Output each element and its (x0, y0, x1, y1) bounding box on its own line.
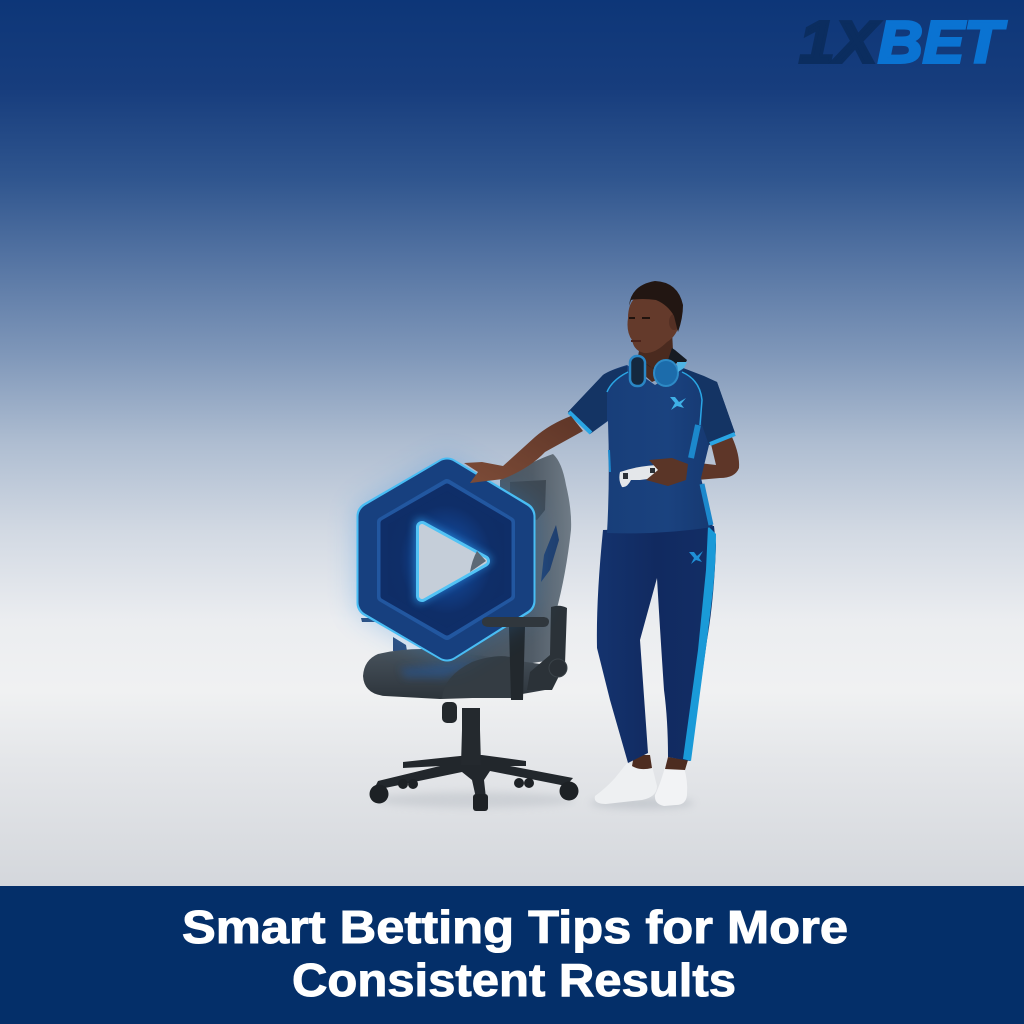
trouser stripe (683, 526, 716, 761)
casters (370, 778, 578, 811)
recline knob (549, 659, 567, 677)
face (628, 295, 680, 353)
side panel (527, 606, 567, 690)
play hexagon icon (357, 458, 535, 662)
chair seen through play button (470, 551, 486, 572)
seat highlight (400, 660, 480, 678)
hexagon groove (382, 484, 510, 635)
ear (669, 314, 679, 330)
right shoe (655, 767, 687, 806)
chair back blue reflection (541, 525, 559, 582)
gas lift (461, 708, 481, 765)
outstretched arm (464, 416, 583, 483)
trousers (597, 526, 716, 763)
right arm (652, 437, 739, 486)
play button (422, 527, 484, 596)
armrest post (509, 627, 525, 700)
game controller (619, 465, 663, 487)
armrest pad (482, 617, 549, 627)
seat cushion (363, 649, 545, 699)
shirt (568, 365, 735, 533)
seat side bolster (442, 656, 512, 698)
chair back headrest pad (510, 480, 546, 520)
logo BET: BET (878, 10, 1007, 76)
hand on controller (646, 458, 688, 486)
chair bracket pieces (361, 618, 407, 651)
shoes (595, 763, 687, 806)
title text: Consistent Results (292, 954, 736, 1006)
headband (644, 348, 687, 370)
title banner (0, 886, 1024, 1024)
logo: 1XBET (799, 10, 1007, 76)
hexagon rim (372, 473, 520, 646)
floor shadows (375, 792, 694, 809)
hexagon inner face (384, 487, 508, 632)
office chair (361, 454, 578, 811)
right ear cup (654, 360, 678, 386)
eyes and lips (629, 317, 650, 342)
left ear cup (630, 356, 645, 386)
headphones (630, 348, 687, 386)
hexagon glow (357, 458, 535, 662)
ankles (632, 755, 688, 770)
shirt seams and trims (569, 372, 735, 525)
headphone accent (677, 362, 687, 372)
title text: Smart Betting Tips for More (182, 901, 848, 953)
banner background (0, 886, 1024, 1024)
sleeves (568, 366, 735, 445)
height lever (442, 702, 457, 723)
play button inner fill (422, 527, 484, 596)
chair base legs (374, 755, 573, 798)
chair back (440, 454, 571, 668)
neck (636, 330, 674, 382)
left shoe (595, 763, 657, 804)
shirt logo (670, 397, 686, 410)
hexagon cyan outline (371, 472, 521, 647)
play button glow (420, 524, 486, 598)
person (464, 281, 739, 806)
logo 1X: 1X (799, 10, 881, 76)
hair (629, 281, 683, 332)
trouser logo (689, 551, 703, 564)
controller buttons (623, 468, 655, 479)
